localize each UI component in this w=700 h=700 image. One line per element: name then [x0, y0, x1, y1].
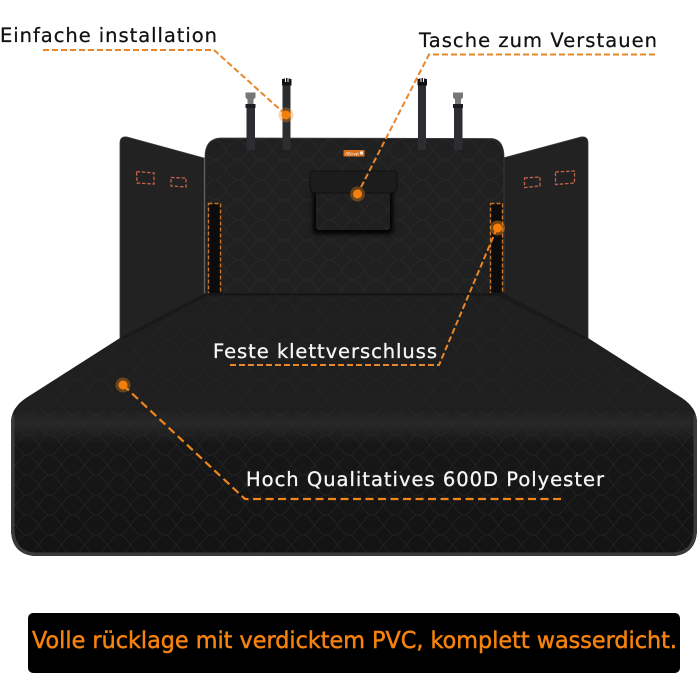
icon: hotspot installation — [278, 108, 294, 122]
icon: storage pocket — [310, 171, 397, 234]
panel: rear seat backrest — [205, 138, 504, 298]
icon: strap with clip left inner — [282, 78, 292, 150]
panel: boot floor and front flap — [11, 293, 697, 556]
icon: left wing stitched patch large — [136, 172, 154, 184]
heading: Feste klettverschluss: Feste klettverschluss — [213, 340, 437, 363]
callout: waterproof backing banner — [28, 613, 680, 673]
icon: right wing stitched patch large — [556, 171, 574, 184]
icon: strap with clip right inner — [418, 78, 427, 150]
icon: left wing stitched patch small — [171, 178, 186, 187]
icon: hotspot polyester — [116, 378, 130, 392]
heading: Hoch Qualitatives 600D Polyester: Hoch Qualitatives 600D Polyester — [246, 468, 605, 491]
icon: hotspot velcro — [490, 220, 505, 236]
callout: waterproof backing banner: Volle rücklage mit verdicktem PVC, komplett wasserdicht. — [32, 628, 677, 654]
icon: strap with buckle left outer — [246, 92, 256, 150]
icon: strap with buckle right outer — [453, 92, 463, 150]
icon: right velcro slot — [490, 204, 502, 294]
heading: Tasche zum Verstauen: Tasche zum Verstauen — [418, 29, 657, 52]
icon: brand label: AllSmart — [345, 151, 359, 157]
icon: hotspot pocket — [350, 186, 365, 202]
panel: left side wing — [120, 137, 204, 345]
icon: brand label — [344, 150, 364, 157]
icon: left velcro slot — [208, 204, 220, 294]
arrow: pocket leader line — [357, 54, 655, 195]
arrow: polyester leader line — [123, 385, 561, 499]
arrow: velcro leader line — [230, 228, 497, 365]
heading: Einfache installation: Einfache installation — [0, 24, 217, 47]
arrow: installation leader line — [43, 50, 286, 115]
panel: right side wing — [503, 137, 588, 345]
icon: right wing stitched patch small — [524, 177, 540, 188]
